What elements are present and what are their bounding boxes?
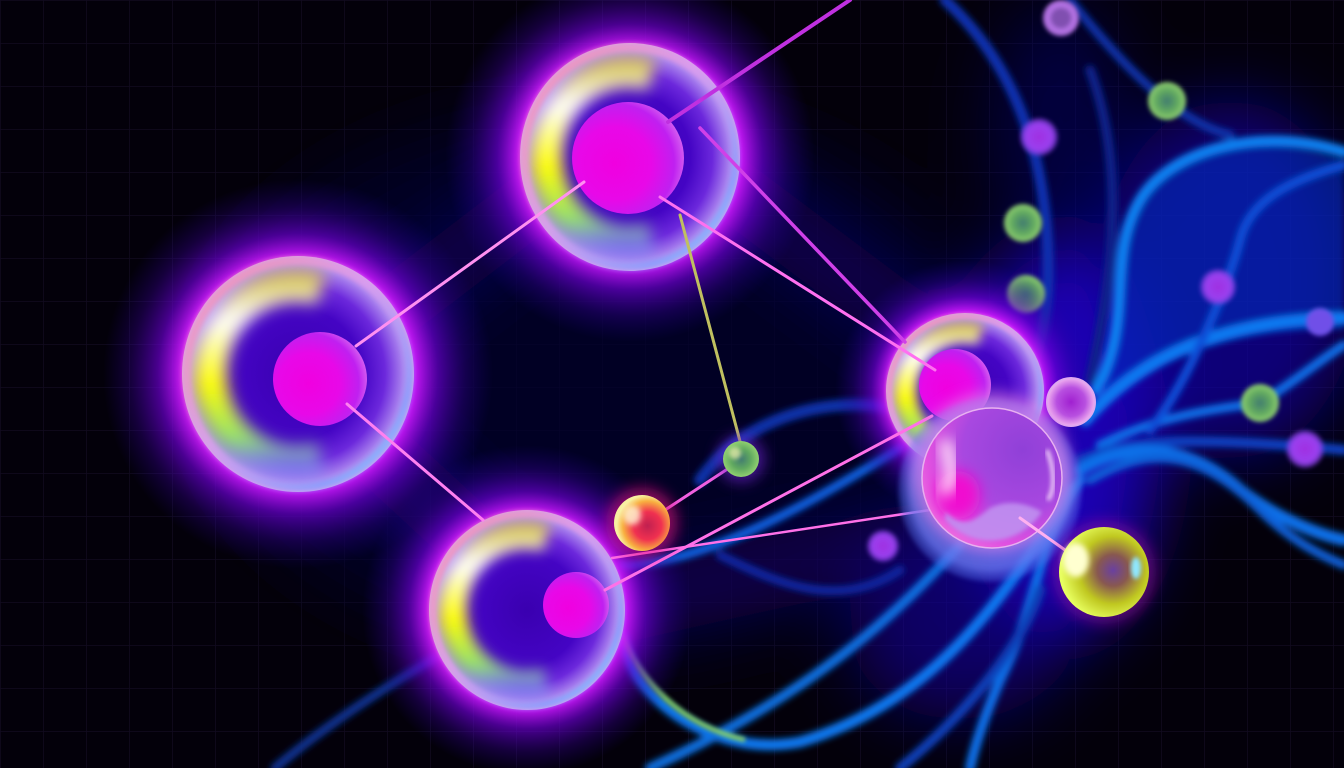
line: left bubble to lower bubble — [347, 404, 483, 520]
bubble: right — [835, 260, 1095, 520]
dot: faint violet — [1306, 308, 1334, 336]
halo: pale blue behind large sphere — [898, 398, 1082, 582]
line: top bubble to olive node — [680, 215, 741, 445]
ambient violet glow — [200, 0, 1344, 720]
line: top bubble to right bubble second — [700, 128, 905, 342]
green tail of curve — [622, 635, 745, 740]
node: big yellow ball — [1052, 520, 1156, 624]
dot: purple top — [1043, 0, 1079, 36]
sphere: large pink-violet — [912, 392, 1072, 552]
line: lower bubble to large sphere — [612, 510, 930, 558]
node: red orange ball — [606, 487, 678, 559]
blue flowing curves — [275, 0, 1344, 768]
dot: purple right — [1200, 269, 1236, 305]
node: olive ball — [717, 435, 765, 483]
bubble: left — [103, 179, 493, 569]
dot: purple far right — [1286, 430, 1324, 468]
dot: green right — [1241, 384, 1279, 422]
connector lines — [347, 0, 935, 590]
bubble: top — [445, 0, 815, 342]
bubble: lower — [362, 445, 692, 768]
line: large sphere to yellow ball — [1020, 518, 1065, 550]
background dots — [867, 0, 1334, 562]
dot: green top — [1148, 82, 1186, 120]
dot: green — [1004, 204, 1042, 242]
dot: purple bottom — [867, 530, 899, 562]
dot: green lower — [1007, 275, 1045, 313]
line: olive node to red node — [665, 470, 726, 510]
core: top — [572, 102, 684, 214]
core: left — [273, 332, 367, 426]
dot: purple — [1020, 118, 1058, 156]
core: right — [919, 349, 991, 421]
line: top bubble to left bubble — [356, 182, 584, 346]
node: small pink bubble — [1047, 378, 1095, 426]
line: top bubble to far top — [668, 0, 850, 122]
line: lower bubble to right cluster — [605, 416, 932, 590]
line: top bubble to right bubble — [660, 197, 935, 370]
core: lower — [543, 572, 609, 638]
